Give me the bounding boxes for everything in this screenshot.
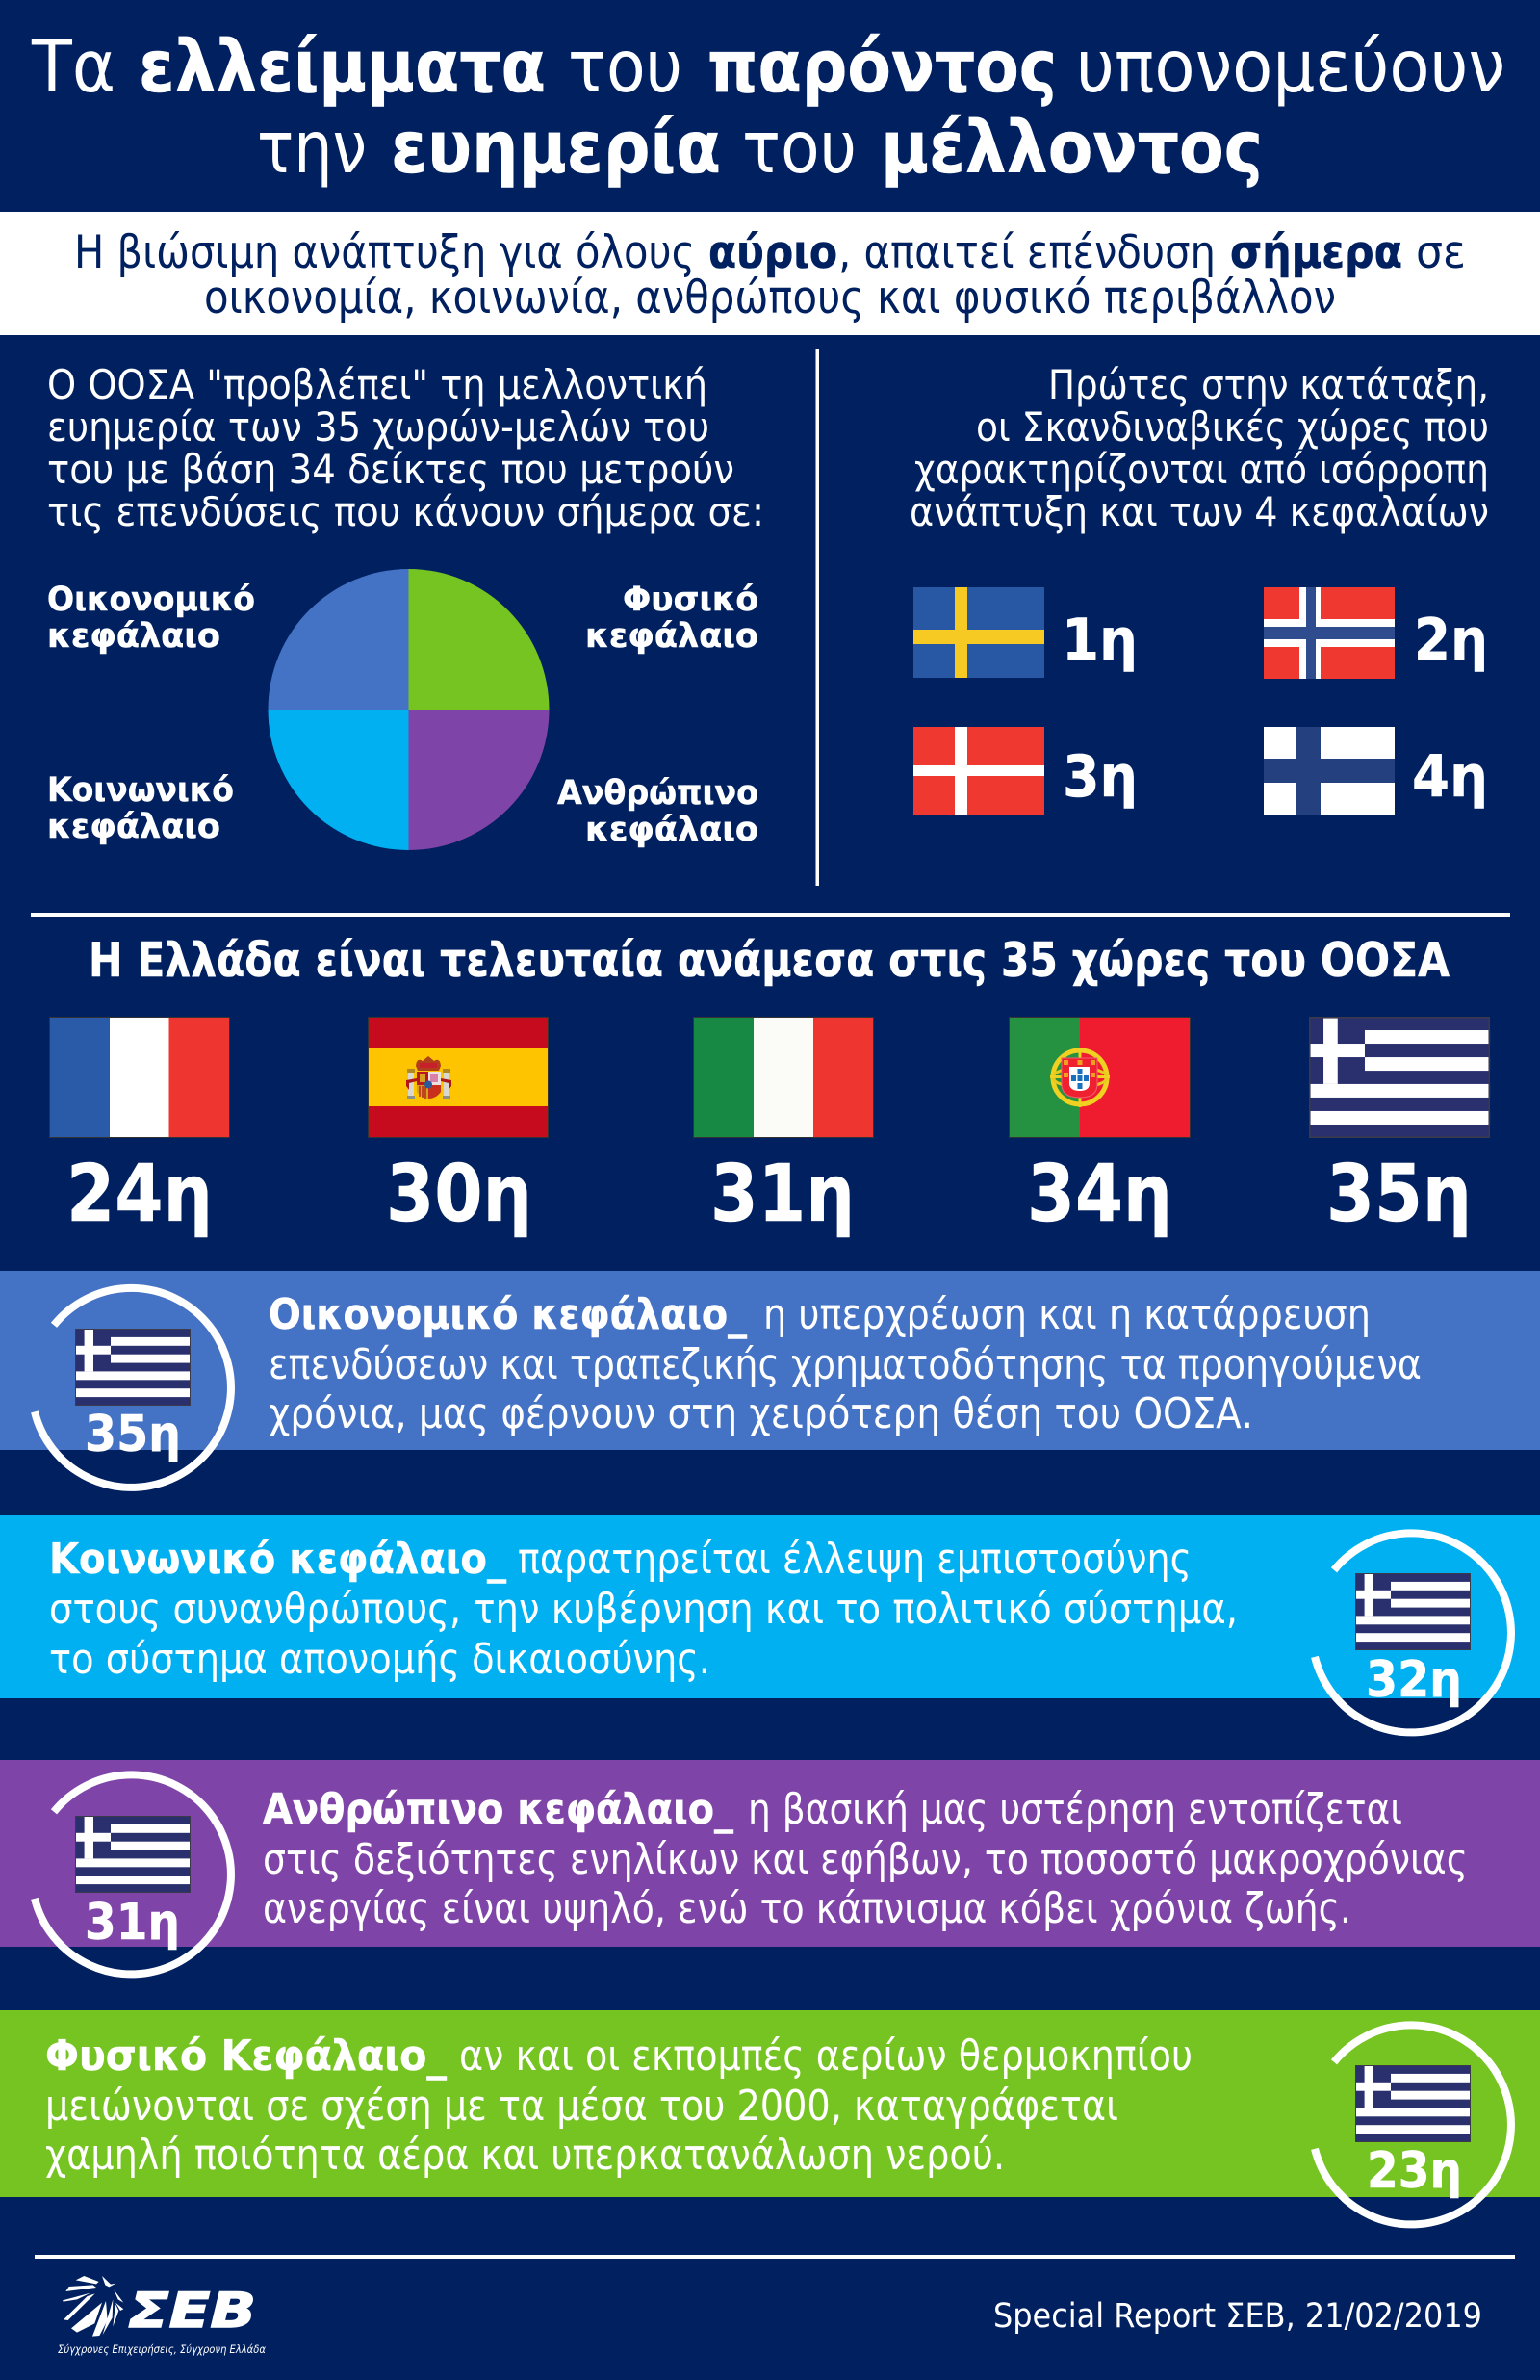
badge: economic rank 35: 35η <box>85 1406 181 1463</box>
title: του <box>742 105 857 190</box>
subtitle band: , απαιτεί επένδυση <box>838 226 1216 279</box>
subtitle band <box>0 212 1540 335</box>
coat of arms <box>1050 1048 1110 1107</box>
footer source: Special Report ΣΕΒ, 21/02/2019 <box>993 2297 1482 2336</box>
panel text: Ανθρώπινο κεφάλαιο_ <box>263 1785 733 1834</box>
panel: natural capital <box>0 2010 1540 2197</box>
subtitle band: Η βιώσιμη ανάπτυξη για όλους <box>74 226 695 279</box>
title: την <box>257 105 367 190</box>
badge: social rank 32: 32η <box>1366 1651 1462 1709</box>
pie labels: Οικονομικό <box>47 581 255 619</box>
flag: Spain <box>368 1017 549 1138</box>
panel text: ανεργίας είναι υψηλό, ενώ το κάπνισμα κόβει χρόνια ζωής. <box>263 1884 1351 1933</box>
flag: Greece large <box>1309 1017 1490 1138</box>
intro text: Scandinavian countries: Πρώτες στην κατάταξη, <box>1048 361 1489 408</box>
pie chart: four capitals <box>268 569 549 850</box>
panel text: Οικονομικό κεφάλαιο_ <box>269 1290 747 1339</box>
pie labels: κεφάλαιο <box>585 811 758 849</box>
subtitle band: αύριο <box>708 226 837 279</box>
badge: social rank 32 <box>1315 1533 1511 1732</box>
pie labels: Φυσικό <box>623 581 758 619</box>
flag: Finland <box>1264 727 1395 815</box>
flag: France <box>49 1017 230 1138</box>
rank 2: 2η <box>1414 607 1488 674</box>
pie labels: κεφάλαιο <box>585 617 758 656</box>
subtitle band: οικονομία, κοινωνία, ανθρώπους και φυσικό περιβάλλον <box>204 272 1336 324</box>
panel text <box>45 2031 1193 2180</box>
panel text: η βασική μας υστέρηση εντοπίζεται <box>748 1785 1402 1834</box>
pie labels <box>47 581 758 849</box>
panel: social capital <box>0 1515 1540 1698</box>
rank Spain: 30η <box>386 1149 532 1240</box>
title: Τα <box>31 24 116 109</box>
rank 4: 4η <box>1412 743 1488 811</box>
intro text: Scandinavian countries: οι Σκανδιναβικές χώρες που <box>976 403 1489 451</box>
badge: natural rank 23: 23η <box>1367 2142 1462 2200</box>
intro text: OECD forecast: τις επενδύσεις που κάνουν σήμερα σε: <box>47 488 764 535</box>
intro text: Scandinavian countries: χαρακτηρίζονται από ισόρροπη <box>914 446 1489 493</box>
title: του <box>568 24 682 109</box>
title: υπονομεύουν <box>1076 24 1505 109</box>
title: ελλείμματα <box>139 24 546 109</box>
panel text: στους συνανθρώπους, την κυβέρνηση και το πολιτικό σύστημα, <box>49 1585 1238 1634</box>
badge: economic rank 35 <box>35 1288 231 1488</box>
pie labels: κεφάλαιο <box>47 617 220 656</box>
badge: natural rank 23 <box>1315 2025 1511 2224</box>
panel text: χρόνια, μας φέρνουν στη χειρότερη θέση του ΟΟΣΑ. <box>269 1389 1253 1438</box>
panel text <box>49 1535 1238 1684</box>
pie labels: Κοινωνικό <box>47 771 234 810</box>
intro text: OECD forecast: ευημερία των 35 χωρών-μελών του <box>47 403 709 451</box>
intro text: Scandinavian countries <box>910 361 1489 535</box>
flag: Sweden <box>913 587 1044 678</box>
logo: SEV: ΣΕΒ <box>128 2283 256 2339</box>
intro text: OECD forecast: του με βάση 34 δείκτες που μετρούν <box>47 446 734 493</box>
logo: SEV <box>58 2276 266 2356</box>
panel text: η υπερχρέωση και η κατάρρευση <box>763 1290 1371 1339</box>
panel text: μειώνονται σε σχέση με τα μέσα του 2000, καταγράφεται <box>45 2082 1118 2131</box>
badge: human rank 31 <box>35 1774 231 1974</box>
rank 3: 3η <box>1063 743 1138 811</box>
title <box>31 24 1505 190</box>
panel text: Κοινωνικό κεφάλαιο_ <box>49 1535 506 1584</box>
rank Portugal: 34η <box>1027 1149 1172 1240</box>
rank France: 24η <box>66 1149 213 1240</box>
title: μέλλοντος <box>881 105 1263 190</box>
panel text: αν και οι εκπομπές αερίων θερμοκηπίου <box>459 2031 1193 2081</box>
rank 1: 1η <box>1062 607 1138 674</box>
subtitle band: σε <box>1416 226 1466 279</box>
flag: Portugal <box>1009 1017 1191 1138</box>
title: ευημερία <box>391 105 721 190</box>
coat of arms <box>406 1056 451 1099</box>
flag: Norway <box>1264 587 1395 679</box>
title: παρόντος <box>707 24 1057 109</box>
panel text <box>269 1290 1422 1438</box>
intro text: OECD forecast: Ο ΟΟΣΑ "προβλέπει" τη μελλοντική <box>47 361 707 408</box>
intro text: OECD forecast <box>47 361 764 535</box>
panel text: παρατηρείται έλλειψη εμπιστοσύνης <box>518 1535 1192 1584</box>
intro text: Scandinavian countries: ανάπτυξη και των 4 κεφαλαίων <box>910 488 1489 535</box>
rank Greece: 35η <box>1326 1149 1472 1240</box>
panel: economic capital <box>0 1271 1540 1450</box>
subtitle band: σήμερα <box>1230 226 1402 279</box>
pie labels: κεφάλαιο <box>47 808 220 846</box>
panel text: Φυσικό Κεφάλαιο_ <box>45 2031 447 2081</box>
panel text: χαμηλή ποιότητα αέρα και υπερκατανάλωση νερού. <box>45 2131 1005 2180</box>
badge: human rank 31: 31η <box>85 1894 180 1952</box>
panel: human capital <box>0 1760 1540 1947</box>
rank Italy: 31η <box>710 1149 855 1240</box>
pie labels: Ανθρώπινο <box>557 774 758 813</box>
panel text: το σύστημα απονομής δικαιοσύνης. <box>49 1635 710 1684</box>
flag: Italy <box>693 1017 874 1138</box>
logo: SEV: Σύγχρονες Επιχειρήσεις, Σύγχρονη Ελλάδα <box>58 2342 266 2356</box>
flag: Denmark <box>913 727 1044 815</box>
panel text <box>263 1785 1468 1933</box>
